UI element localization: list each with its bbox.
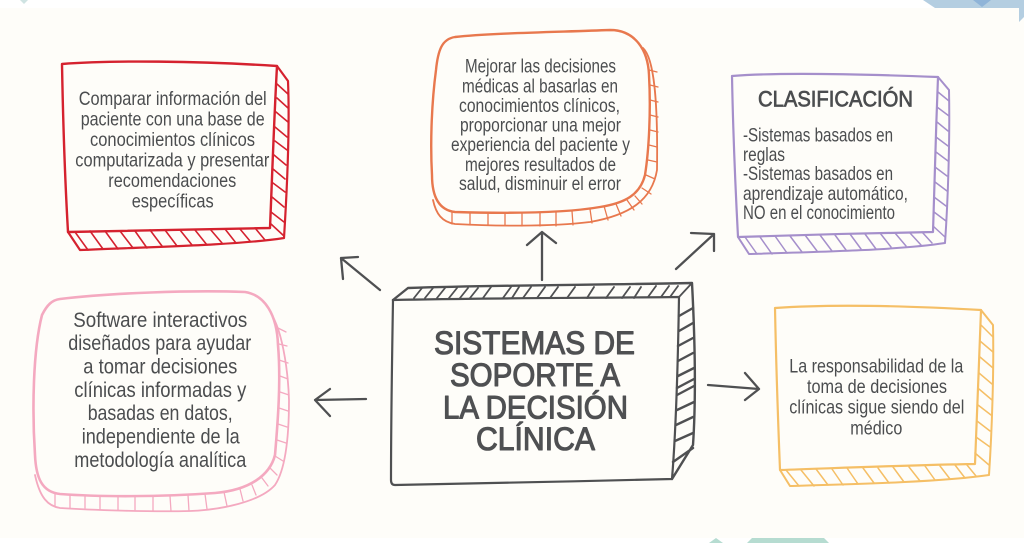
arrow: to purple panel [676, 233, 714, 269]
text: comparar información: recomendaciones [108, 170, 236, 192]
text: mejorar las decisiones: médicas al basarlas en [462, 76, 618, 98]
panel: software interactivos (pink) [33, 291, 289, 511]
text: software interactivos: a tomar decisiones [83, 355, 237, 379]
heading: clasificación: CLASIFICACIÓN [758, 86, 913, 112]
arrow: to yellow panel [708, 373, 759, 400]
text: comparar información [75, 88, 270, 212]
text: responsabilidad: La responsabilidad de la [789, 356, 963, 378]
arrow: to pink panel [315, 389, 366, 416]
arrow: to red panel [341, 257, 380, 290]
text: comparar información: paciente con una base de [81, 108, 265, 130]
panel: título central [391, 283, 695, 485]
text: tipos de sistemas: -Sistemas basados en [743, 125, 893, 147]
text: software interactivos: metodología analítica [74, 448, 246, 472]
text: tipos de sistemas: reglas [743, 144, 785, 166]
text: tipos de sistemas: NO en el conocimiento [743, 202, 895, 224]
text: mejorar las decisiones: proporcionar una mejor [460, 116, 622, 136]
text: software interactivos: clínicas informadas y [74, 378, 247, 402]
text: responsabilidad: médico [850, 417, 902, 439]
text: responsabilidad: toma de decisiones [807, 376, 947, 398]
text: software interactivos [68, 308, 251, 472]
text: mejorar las decisiones [451, 57, 630, 195]
text: tipos de sistemas [743, 125, 908, 224]
text: responsabilidad: clínicas sigue siendo del [789, 397, 964, 419]
text: mejorar las decisiones: Mejorar las decisiones [465, 57, 616, 78]
heading: sistemas de soporte a la decisión clínica: LA DECISIÓN [443, 390, 628, 426]
text: comparar información: específicas [132, 190, 214, 212]
text: comparar información: Comparar información del [79, 88, 267, 110]
panel: mejorar las decisiones (orange) [431, 30, 658, 226]
heading: sistemas de soporte a la decisión clínica: SOPORTE A [450, 357, 621, 393]
panel: clasificación (purple) [732, 74, 949, 254]
text: mejorar las decisiones: salud, disminuir el error [459, 174, 622, 195]
text: software interactivos: basadas en datos, [88, 401, 233, 425]
text: mejorar las decisiones: conocimientos clínicos, [459, 96, 620, 117]
text: comparar información: computarizada y presentar [75, 150, 270, 172]
heading: sistemas de soporte a la decisión clínica: CLÍNICA [476, 421, 596, 457]
text: comparar información: conocimientos clínicos [90, 129, 255, 151]
text: software interactivos: diseñados para ayudar [68, 331, 251, 355]
arrow: to orange panel [527, 232, 556, 280]
heading: sistemas de soporte a la decisión clínica [434, 325, 635, 457]
panel: responsabilidad (yellow) [775, 306, 993, 486]
text: tipos de sistemas: aprendizaje automático, [743, 183, 908, 205]
text: mejorar las decisiones: mejores resultados de [465, 155, 616, 176]
text: mejorar las decisiones: experiencia del paciente y [451, 135, 630, 156]
text: responsabilidad [789, 356, 964, 439]
heading: sistemas de soporte a la decisión clínica: SISTEMAS DE [434, 325, 635, 361]
text: tipos de sistemas: -Sistemas basados en [743, 163, 893, 185]
panel: comparar información (red) [62, 62, 289, 250]
text: software interactivos: independiente de la [82, 425, 240, 449]
text: software interactivos: Software interactivos [73, 308, 247, 332]
